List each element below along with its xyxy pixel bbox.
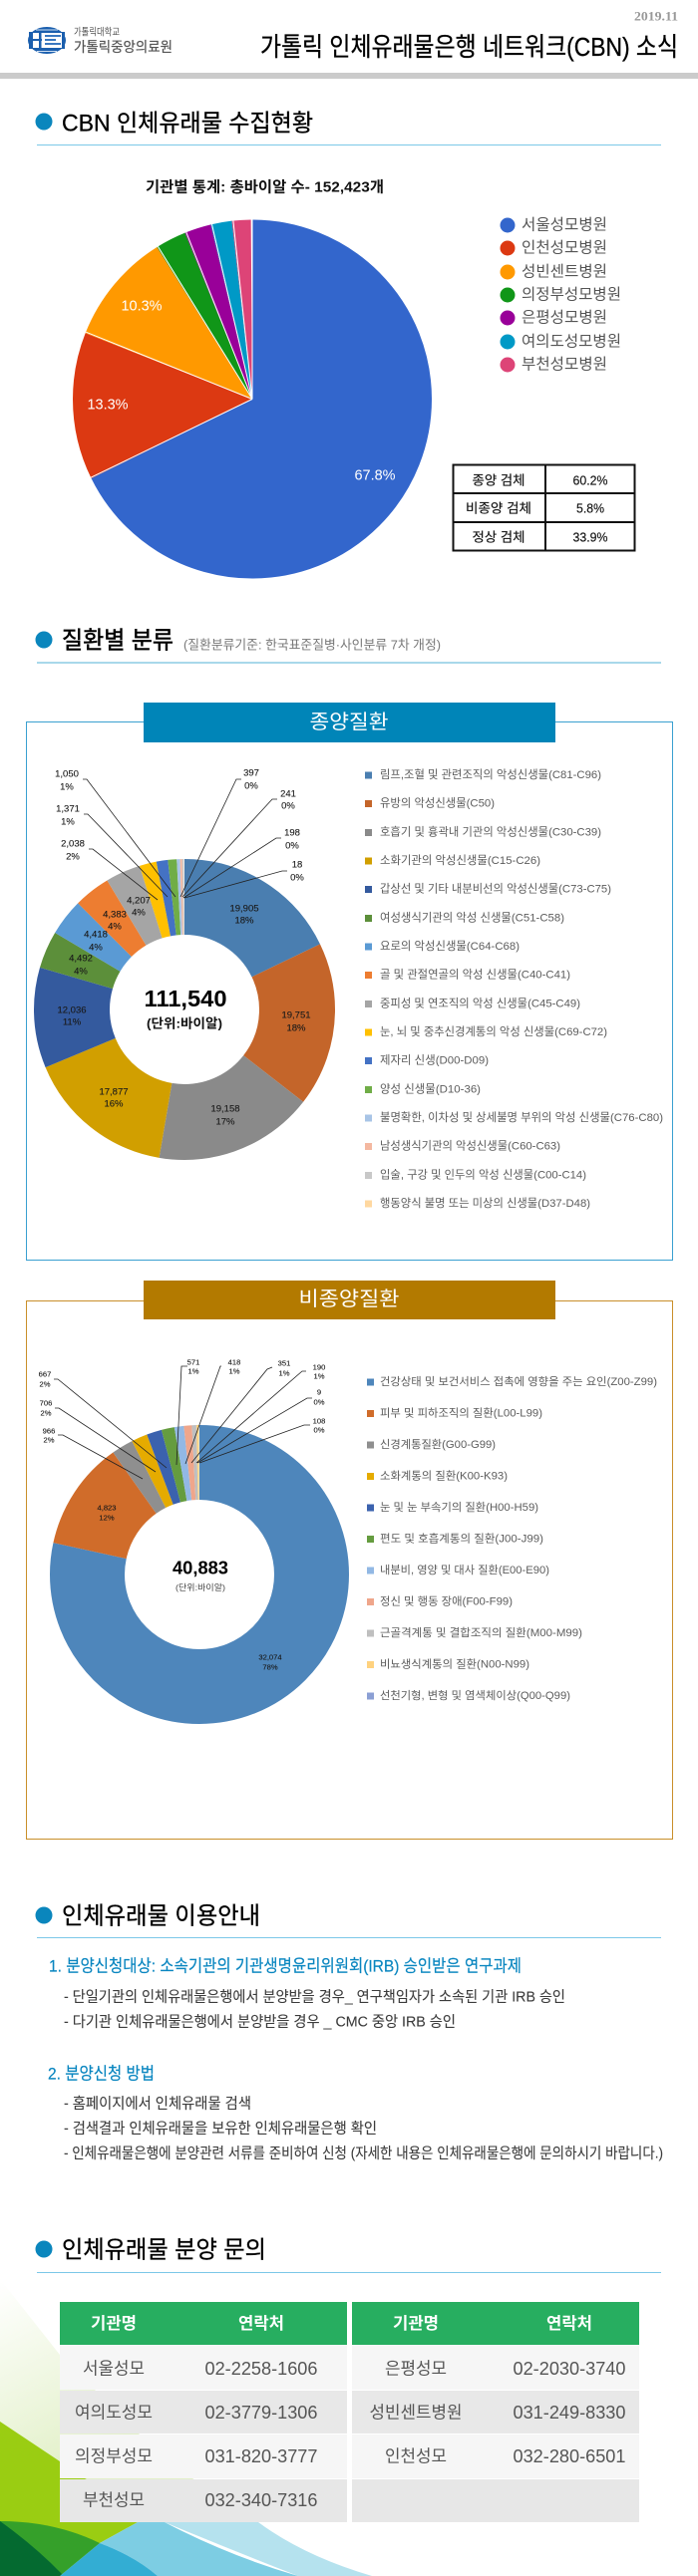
legend: tumor: 양성 신생물(D10-36): [380, 1082, 481, 1095]
legend: tumor: 불명확한, 이차성 및 상세불명 부위의 악성 신생물(C76-C80): [380, 1111, 663, 1124]
panel band: tumor: 종양질환: [309, 711, 389, 733]
donut chart: tumor: 1,371: [56, 803, 80, 815]
biopsy table: 비종양 검체: [466, 500, 531, 516]
donut chart: tumor: 241: [280, 789, 296, 799]
heading: 질환별 분류: [62, 628, 174, 654]
legend: tumor: 요로의 악성신생물(C64-C68): [380, 940, 520, 953]
donut chart: non-tumor: 351: [278, 1359, 290, 1367]
donut chart: tumor: 4,207: [127, 895, 151, 907]
donut chart: non-tumor: 667: [39, 1369, 51, 1379]
contact table: right: 인천성모: [385, 2447, 447, 2465]
heading bullet: [36, 2240, 52, 2258]
donut chart: tumor: 0%: [285, 841, 299, 851]
guide item 2: [48, 2065, 663, 2162]
biopsy table: 종양 검체: [473, 472, 524, 488]
legend: tumor: 유방의 악성신생물(C50): [380, 797, 495, 810]
contact table: right: 연락처: [546, 2314, 592, 2333]
legend: tumor: 여성생식기관의 악성 신생물(C51-C58): [380, 911, 564, 924]
donut chart: non-tumor: 40,883: [173, 1557, 228, 1578]
donut chart: tumor: 397: [243, 767, 259, 779]
legend: tumor: 눈, 뇌 및 중추신경계통의 악성 신생물(C69-C72): [380, 1024, 607, 1038]
donut chart: tumor: 16%: [104, 1098, 124, 1110]
donut chart: tumor: 18%: [286, 1022, 306, 1034]
panel: tumor diseases: [26, 703, 672, 1260]
biopsy table: [453, 464, 635, 551]
legend: tumor: 중피성 및 연조직의 악성 신생물(C45-C49): [380, 997, 580, 1009]
donut chart: tumor: 1%: [61, 817, 75, 827]
heading bullet: [36, 632, 52, 648]
donut chart: tumor: 1,050: [55, 769, 79, 779]
heading: CBN 인체유래물 수집현황: [62, 110, 313, 138]
donut chart: tumor: 4%: [132, 907, 146, 919]
pie legend: 인천성모병원: [522, 239, 607, 257]
donut chart: tumor: 2,038: [61, 839, 85, 849]
panel band: non-tumor: [144, 1281, 555, 1319]
donut chart: non-tumor: 0%: [314, 1397, 325, 1407]
guide item 2: - 홈페이지에서 인체유래물 검색: [64, 2095, 251, 2113]
contact table: right: 02-2030-3740: [513, 2359, 626, 2379]
donut chart: tumor: 18%: [234, 915, 254, 927]
contact table: right: 성빈센트병원: [369, 2404, 463, 2422]
guide item 1: - 다기관 인체유래물은행에서 분양받을 경우 _ CMC 중앙 IRB 승인: [64, 2013, 456, 2031]
pie legend: [501, 215, 621, 373]
donut chart: tumor: 4%: [89, 943, 103, 953]
pie legend: 성빈센트병원: [522, 263, 607, 281]
donut chart: non-tumor: 418: [228, 1357, 240, 1367]
pie legend: 서울성모병원: [522, 215, 607, 233]
legend: tumor: 갑상선 및 기타 내분비선의 악성신생물(C73-C75): [380, 883, 611, 896]
pie chart: 10.3%: [122, 297, 162, 315]
contact table: left: 여의도성모: [75, 2404, 153, 2422]
legend: tumor: 입술, 구강 및 인두의 악성 신생물(C00-C14): [380, 1168, 586, 1181]
background art: bottom-left green and blue waves: [0, 2279, 372, 2576]
donut chart: tumor: 17%: [215, 1116, 235, 1128]
legend: tumor: 호흡기 및 흉곽내 기관의 악성신생물(C30-C39): [380, 824, 601, 838]
donut chart: non-tumor: 0%: [314, 1425, 325, 1435]
biopsy table: 5.8%: [576, 500, 604, 516]
donut chart: tumor: 0%: [281, 801, 295, 811]
panel band: tumor: [144, 703, 555, 742]
contact table: left: 연락처: [238, 2314, 284, 2333]
logo text: 가톨릭대학교: [74, 26, 120, 38]
donut chart: tumor: 4%: [74, 967, 88, 977]
donut chart: tumor: 2%: [66, 851, 80, 863]
donut chart: tumor: 4,383: [103, 909, 127, 921]
legend: non-tumor: 비뇨생식계통의 질환(N00-N99): [380, 1658, 529, 1670]
donut chart: non-tumor: 1%: [314, 1371, 325, 1381]
guide item 1: - 단일기관의 인체유래물은행에서 분양받을 경우_ 연구책임자가 소속된 기관 IRB 승인: [64, 1989, 565, 2005]
guide item 2: - 검색결과 인체유래물을 보유한 인체유래물은행 확인: [64, 2121, 377, 2137]
logo text: [74, 26, 173, 55]
pie chart: 67.8%: [355, 466, 395, 484]
donut chart: non-tumor: 1%: [229, 1367, 240, 1375]
legend: non-tumor: 근골격계통 및 결합조직의 질환(M00-M99): [380, 1626, 582, 1639]
legend: non-tumor: 정신 및 행동 장애(F00-F99): [380, 1594, 513, 1608]
donut chart: non-tumor: 32,074: [258, 1652, 282, 1662]
donut chart: non-tumor: 4,823: [97, 1503, 117, 1513]
donut chart: tumor: 4,418: [84, 929, 108, 941]
donut chart: tumor: 4,492: [69, 953, 93, 965]
panel: non-tumor diseases: [26, 1281, 672, 1840]
contact table: right: [352, 2302, 639, 2522]
donut chart: tumor: 17,877: [99, 1086, 129, 1098]
donut chart: non-tumor: 966: [43, 1427, 55, 1435]
pie legend: 은평성모병원: [522, 309, 607, 327]
chart title: 기관별 통계: 총바이알 수- 152,423개: [146, 179, 384, 195]
biopsy table: 60.2%: [572, 472, 608, 488]
donut chart: tumor: 111,540: [144, 986, 227, 1011]
donut chart: tumor: [55, 767, 311, 1128]
legend: non-tumor: 건강상태 및 보건서비스 접촉에 영향을 주는 요인(Z00-Z99): [380, 1375, 657, 1388]
donut chart: tumor: 198: [284, 827, 300, 839]
heading bullet: [36, 114, 52, 130]
biopsy table: 정상 검체: [473, 530, 524, 544]
contact table: left: 032-340-7316: [205, 2490, 317, 2510]
donut chart: non-tumor: (단위:바이알): [175, 1582, 225, 1592]
contact table: left: [60, 2302, 347, 2522]
legend: non-tumor: 눈 및 눈 부속기의 질환(H00-H59): [380, 1501, 538, 1514]
pie legend: 의정부성모병원: [522, 285, 621, 303]
donut chart: non-tumor: 9: [317, 1387, 321, 1397]
contact table: left: 의정부성모: [75, 2447, 153, 2465]
section: biospecimen usage guide: [36, 1903, 663, 2162]
contact table: right: 기관명: [393, 2314, 439, 2333]
donut chart: non-tumor: 2%: [44, 1435, 55, 1445]
date: 2019.11: [634, 8, 678, 24]
pie chart: 13.3%: [88, 397, 128, 413]
donut chart: tumor: 11%: [63, 1016, 82, 1028]
donut chart: non-tumor: 1%: [188, 1367, 199, 1375]
donut chart: non-tumor: 108: [313, 1417, 325, 1425]
contact table: left: 서울성모: [83, 2360, 145, 2378]
legend: non-tumor: 내분비, 영양 및 대사 질환(E00-E90): [380, 1564, 549, 1576]
pie legend: 부천성모병원: [522, 355, 607, 373]
donut chart: non-tumor: 12%: [99, 1513, 115, 1523]
donut chart: non-tumor: 78%: [262, 1662, 278, 1672]
donut chart: non-tumor: 2%: [41, 1409, 52, 1417]
contact table: right: 031-249-8330: [513, 2403, 626, 2423]
heading note: (질환분류기준: 한국표준질병·사인분류 7차 개정): [183, 638, 441, 652]
donut chart: tumor: 19,751: [281, 1010, 311, 1020]
donut chart: tumor: (단위:바이알): [147, 1016, 222, 1030]
contact table: left: 02-3779-1306: [205, 2403, 317, 2423]
donut chart: tumor: 18: [292, 859, 302, 871]
donut chart: non-tumor: 706: [40, 1399, 52, 1407]
legend: tumor: 행동양식 불명 또는 미상의 신생물(D37-D48): [380, 1197, 590, 1210]
donut chart: tumor: 0%: [244, 781, 258, 791]
legend: tumor: 남성생식기관의 악성신생물(C60-C63): [380, 1140, 560, 1153]
contact table: left: 031-820-3777: [205, 2446, 317, 2466]
legend: tumor: 제자리 신생(D00-D09): [380, 1054, 489, 1067]
guide item 1: 1. 분양신청대상: 소속기관의 기관생명윤리위원회(IRB) 승인받은 연구과제: [49, 1957, 522, 1975]
donut chart: non-tumor: 571: [187, 1357, 199, 1367]
donut chart: tumor: 19,905: [229, 903, 259, 915]
section: distribution contact: [36, 2236, 661, 2522]
donut chart: tumor: 0%: [290, 873, 304, 883]
section: CBN collection status: [36, 110, 661, 551]
heading bullet: [36, 1907, 52, 1923]
contact table: right: 032-280-6501: [513, 2446, 626, 2466]
logo text: 가톨릭중앙의료원: [74, 39, 173, 55]
icon: hospital logo: [28, 27, 66, 54]
contact table: left: 기관명: [91, 2314, 137, 2333]
legend: tumor: 골 및 관절연골의 악성 신생물(C40-C41): [380, 968, 570, 982]
header: [28, 8, 678, 62]
legend: non-tumor: 소화계통의 질환(K00-K93): [380, 1469, 508, 1483]
legend: tumor: 소화기관의 악성신생물(C15-C26): [380, 854, 540, 867]
contact table: left: 02-2258-1606: [205, 2359, 317, 2379]
legend: tumor: [365, 767, 663, 1210]
pie legend: 여의도성모병원: [522, 333, 621, 351]
legend: non-tumor: 피부 및 피하조직의 질환(L00-L99): [380, 1405, 542, 1419]
heading: 인체유래물 분양 문의: [62, 2236, 266, 2264]
guide item 2: 2. 분양신청 방법: [48, 2065, 155, 2083]
legend: non-tumor: [367, 1375, 657, 1702]
header gray bar: [0, 73, 698, 79]
donut chart: tumor: 1%: [60, 781, 74, 793]
donut chart: non-tumor: 190: [313, 1363, 325, 1371]
donut chart: non-tumor: 1%: [279, 1369, 290, 1377]
donut chart: tumor: 19,158: [210, 1104, 240, 1114]
donut chart: non-tumor: [39, 1357, 325, 1686]
pie chart: [86, 219, 395, 488]
panel band: non-tumor: 비종양질환: [299, 1288, 399, 1310]
legend: non-tumor: 편도 및 호흡계통의 질환(J00-J99): [380, 1531, 543, 1545]
donut chart: non-tumor: 2%: [40, 1379, 51, 1389]
contact table: right: 은평성모: [385, 2360, 447, 2378]
contact table: left: 부천성모: [83, 2491, 145, 2509]
donut chart: tumor: 4%: [108, 921, 122, 933]
section: classification by disease: [36, 628, 661, 664]
biopsy table: 33.9%: [572, 530, 608, 544]
legend: tumor: 림프,조혈 및 관련조직의 악성신생물(C81-C96): [380, 767, 601, 781]
legend: non-tumor: 신경계통질환(G00-G99): [380, 1438, 496, 1451]
heading: 인체유래물 이용안내: [62, 1903, 260, 1929]
guide item 1: [49, 1957, 565, 2031]
donut chart: tumor: 12,036: [57, 1004, 87, 1016]
legend: non-tumor: 선천기형, 변형 및 염색체이상(Q00-Q99): [380, 1688, 570, 1702]
